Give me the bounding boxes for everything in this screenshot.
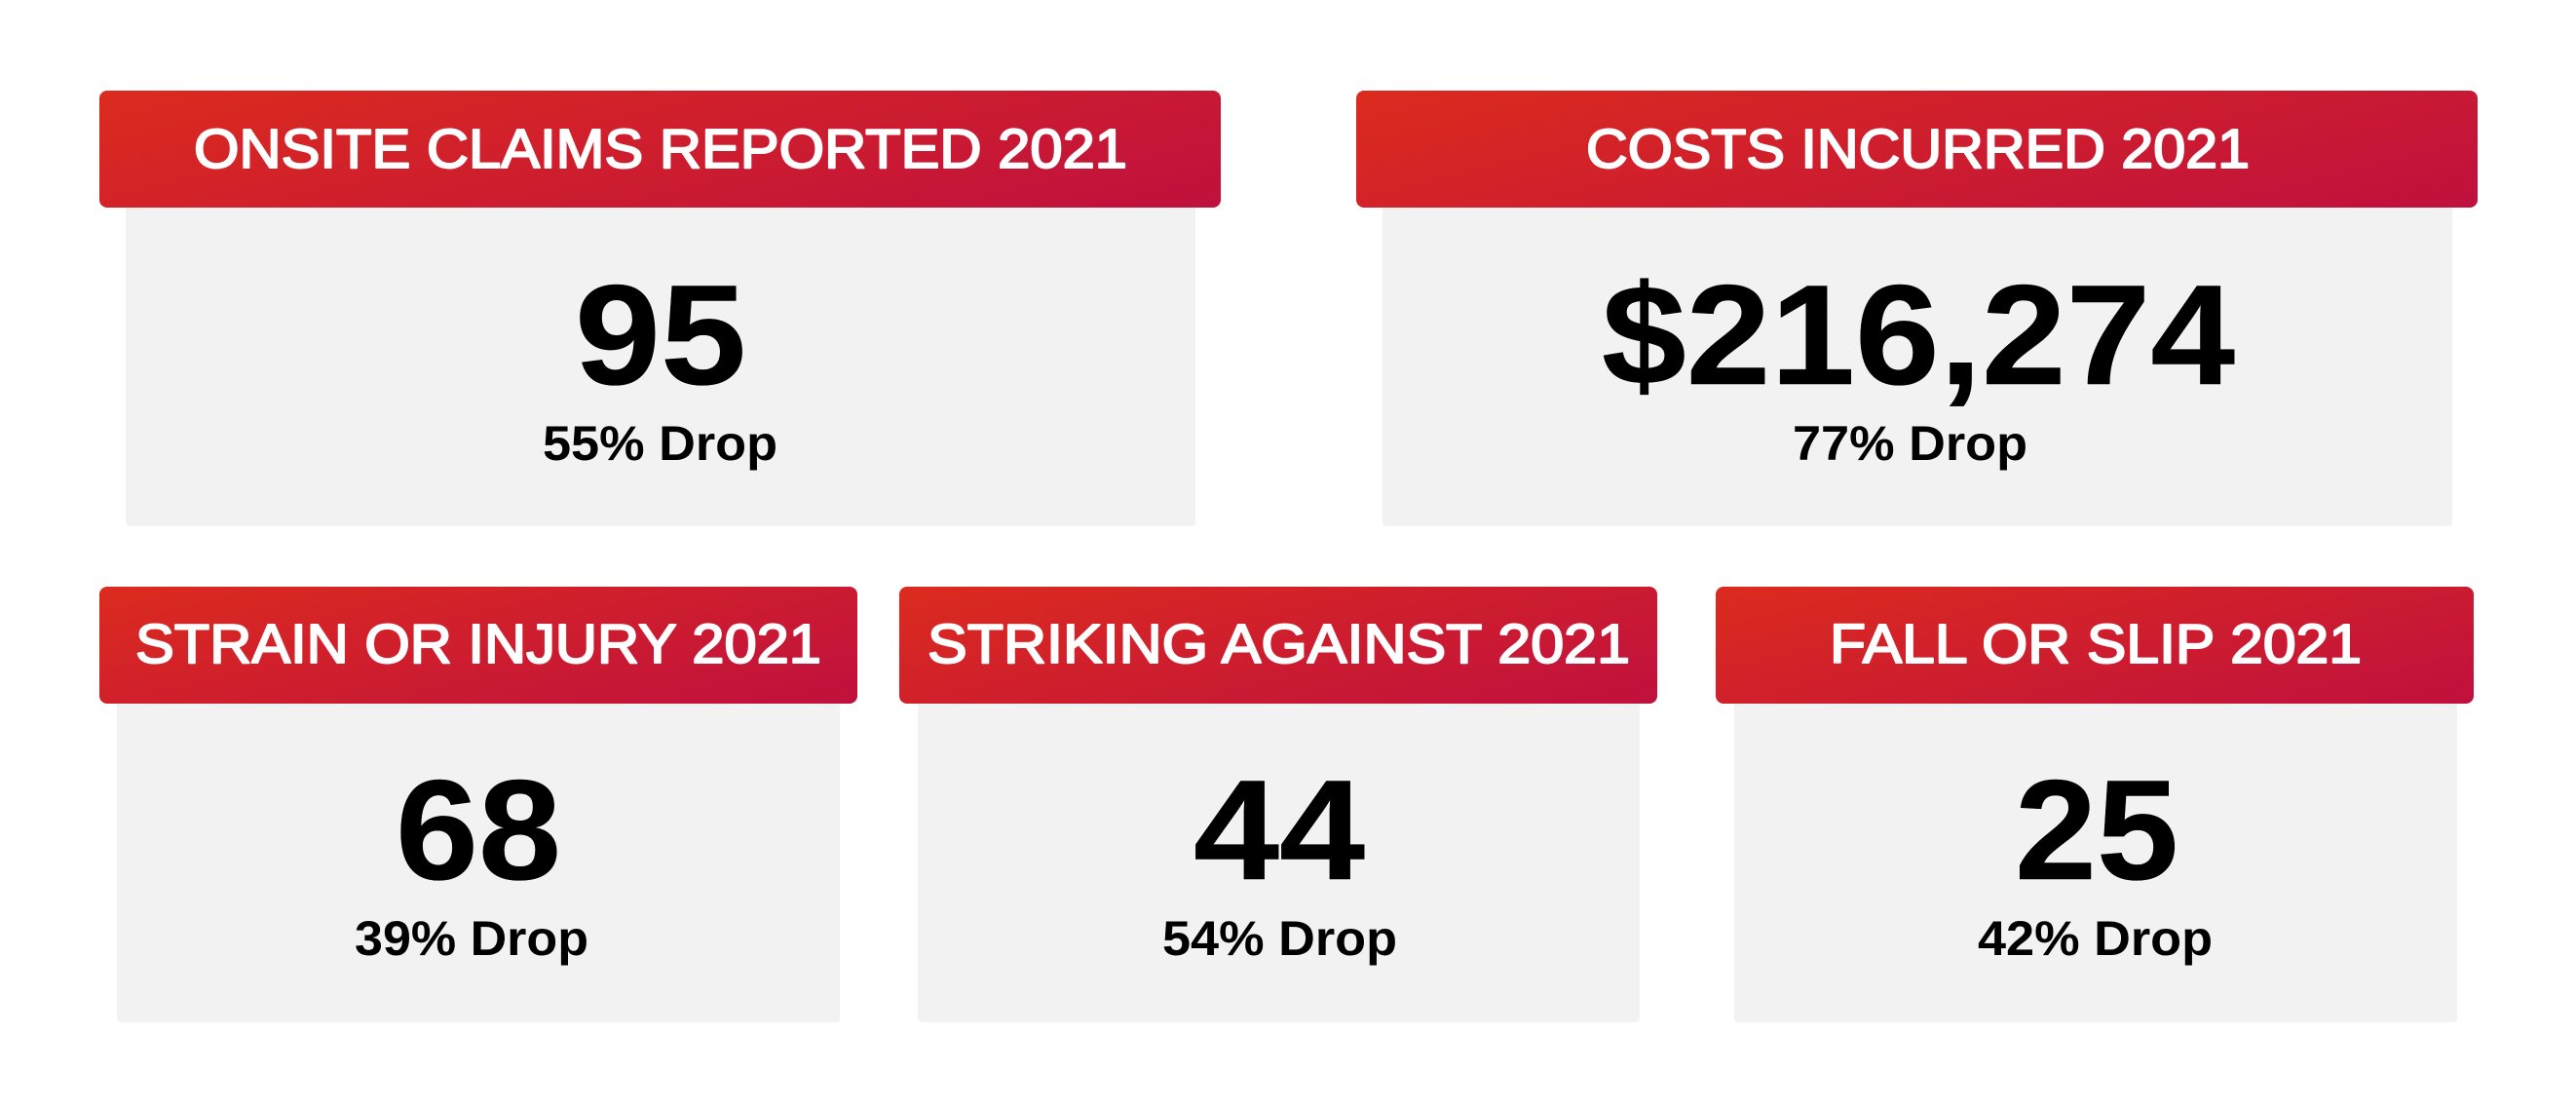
panel: fall or slip [1716,587,2474,1022]
panel body [1734,692,2457,1022]
drop percentage: 54% Drop [1162,911,1397,966]
drop percentage: 39% Drop [355,911,588,966]
panel: onsite claims reported [99,91,1221,526]
header banner [99,91,1221,208]
heading: FALL OR SLIP 2021 [1830,613,2362,675]
big number: 68 [396,750,561,909]
drop percentage: 55% Drop [543,416,777,471]
panel: striking against [899,587,1657,1022]
big number: $216,274 [1602,255,2235,414]
drop percentage: 42% Drop [1978,911,2213,966]
heading: STRAIN OR INJURY 2021 [135,613,821,675]
panel body [117,692,840,1022]
drop percentage: 77% Drop [1793,416,2027,471]
panel body [918,692,1640,1022]
panel: costs incurred [1356,91,2478,526]
header banner [899,587,1657,704]
panel body [1383,195,2452,526]
heading: STRIKING AGAINST 2021 [928,613,1630,675]
big number: 95 [575,255,746,414]
header banner [1716,587,2474,704]
heading: ONSITE CLAIMS REPORTED 2021 [194,118,1127,180]
header banner [1356,91,2478,208]
header banner [99,587,857,704]
heading: COSTS INCURRED 2021 [1586,118,2250,180]
big number: 25 [2015,750,2178,909]
big number: 44 [1193,750,1365,909]
panel body [126,195,1195,526]
panel: strain or injury [99,587,857,1022]
